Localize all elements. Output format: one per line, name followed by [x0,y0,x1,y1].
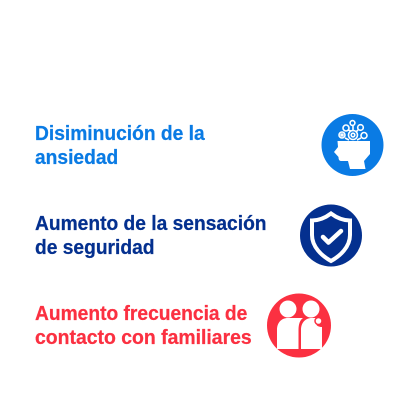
icon: shield with check [300,204,362,266]
text: increased sense of security [35,213,267,259]
text: increased sense of security: Aumento de la sensación [35,213,267,235]
text: increased contact with family: Aumento frecuencia de [35,303,247,325]
text: increased contact with family [35,303,252,349]
text: increased contact with family: contacto con familiares [35,327,252,349]
text: anxiety reduction: Disiminución de la [35,123,205,145]
icon: two people [267,294,331,358]
icon: head with spirals [322,114,384,176]
text: increased sense of security: de seguridad [35,237,155,259]
text: anxiety reduction [35,123,205,169]
text: anxiety reduction: ansiedad [35,147,118,169]
